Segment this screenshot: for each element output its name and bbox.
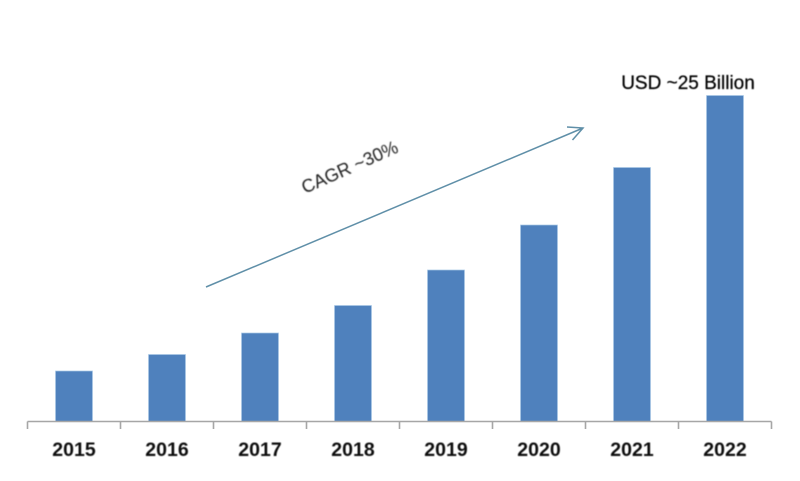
- value callout: USD ~25 Billion: [621, 73, 755, 94]
- year labels: 2022: [703, 439, 747, 461]
- year labels: [52, 439, 747, 461]
- arrow: growth trend: [206, 127, 583, 287]
- year labels: 2016: [145, 439, 189, 461]
- x axis: [28, 422, 772, 429]
- bars: [56, 96, 744, 422]
- CAGR label: CAGR ~30%: [298, 137, 401, 198]
- year labels: 2020: [517, 439, 561, 461]
- year labels: 2015: [52, 439, 96, 461]
- year labels: 2018: [331, 439, 375, 461]
- year labels: 2019: [424, 439, 468, 461]
- year labels: 2021: [610, 439, 654, 461]
- year labels: 2017: [238, 439, 282, 461]
